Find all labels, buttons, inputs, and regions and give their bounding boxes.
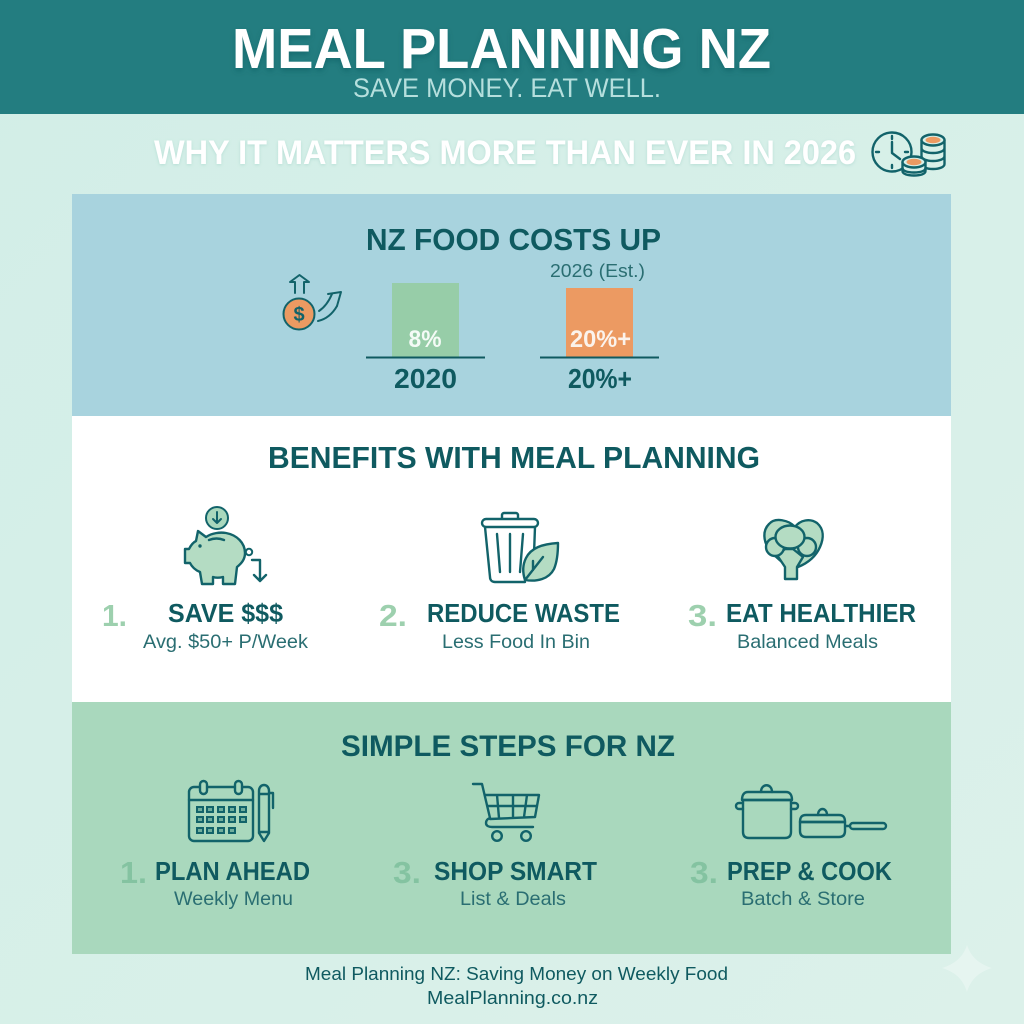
benefit 2: reduce waste: REDUCE WASTE xyxy=(427,600,620,628)
step 1: plan ahead: Weekly Menu xyxy=(174,888,293,910)
step 2: shop smart: 3. xyxy=(393,855,421,890)
bar chart: 2020: 8% xyxy=(408,326,442,353)
icon: shopping cart xyxy=(473,784,539,841)
heading: benefits with meal planning: BENEFITS WITH MEAL PLANNING xyxy=(268,440,760,475)
panel: NZ food costs xyxy=(72,194,951,416)
footer text: Meal Planning NZ: Saving Money on Weekly Food xyxy=(305,963,728,984)
step 1: plan ahead xyxy=(120,855,310,910)
benefit 3: eat healthier xyxy=(688,598,916,653)
benefit 1: save money xyxy=(102,598,308,653)
subtitle: SAVE MONEY. EAT WELL. xyxy=(353,73,661,103)
step 3: prep and cook: PREP & COOK xyxy=(727,858,893,886)
bar chart: 2026 estimate xyxy=(540,261,659,394)
benefit 3: eat healthier: Balanced Meals xyxy=(737,631,878,653)
step 2: shop smart xyxy=(393,855,597,910)
icon: pot and pan xyxy=(736,785,886,838)
benefit 2: reduce waste: 2. xyxy=(379,598,407,633)
step 2: shop smart: SHOP SMART xyxy=(434,858,597,886)
step 3: prep and cook xyxy=(690,855,893,910)
header banner xyxy=(0,0,1024,114)
icon: piggy bank xyxy=(185,507,266,584)
footer text: MealPlanning.co.nz xyxy=(427,987,598,1008)
benefit 1: save money: SAVE $$$ xyxy=(168,600,283,628)
benefit 3: eat healthier: EAT HEALTHIER xyxy=(726,600,916,628)
bar chart: 2026 estimate: 20%+ xyxy=(570,326,631,353)
step 2: shop smart: List & Deals xyxy=(460,888,566,910)
icon: sparkle xyxy=(942,945,992,992)
panel: simple steps xyxy=(72,702,951,954)
icon: rising dollar: $ xyxy=(293,304,305,326)
step 3: prep and cook: 3. xyxy=(690,855,718,890)
title: MEAL PLANNING NZ xyxy=(232,17,771,81)
benefit 2: reduce waste: Less Food In Bin xyxy=(442,631,590,653)
heading: simple steps for NZ: SIMPLE STEPS FOR NZ xyxy=(341,730,675,763)
icon: rising dollar xyxy=(284,275,341,330)
heading: NZ food costs up: NZ FOOD COSTS UP xyxy=(366,222,661,257)
icon: clock and coins xyxy=(872,132,944,176)
step 3: prep and cook: Batch & Store xyxy=(741,888,865,910)
benefit 2: reduce waste xyxy=(379,598,620,653)
benefit 3: eat healthier: 3. xyxy=(688,598,717,633)
icon: bin with leaf xyxy=(482,513,558,582)
footer text xyxy=(305,963,728,1008)
icon: broccoli heart xyxy=(764,520,823,579)
bar chart: 2026 estimate: 20%+ xyxy=(568,363,632,394)
step 1: plan ahead: 1. xyxy=(120,855,147,890)
section heading: why it matters: WHY IT MATTERS MORE THAN EVER IN 2026 xyxy=(154,134,856,172)
bar chart: 2020: 2020 xyxy=(394,363,457,394)
step 1: plan ahead: PLAN AHEAD xyxy=(155,858,310,886)
bar chart: 2020 xyxy=(366,283,485,394)
panel: benefits xyxy=(72,416,951,702)
icon: calendar and pen xyxy=(189,781,273,841)
bar chart: 2026 estimate: 2026 (Est.) xyxy=(550,261,645,281)
benefit 1: save money: 1. xyxy=(102,598,127,633)
benefit 1: save money: Avg. $50+ P/Week xyxy=(143,631,308,653)
